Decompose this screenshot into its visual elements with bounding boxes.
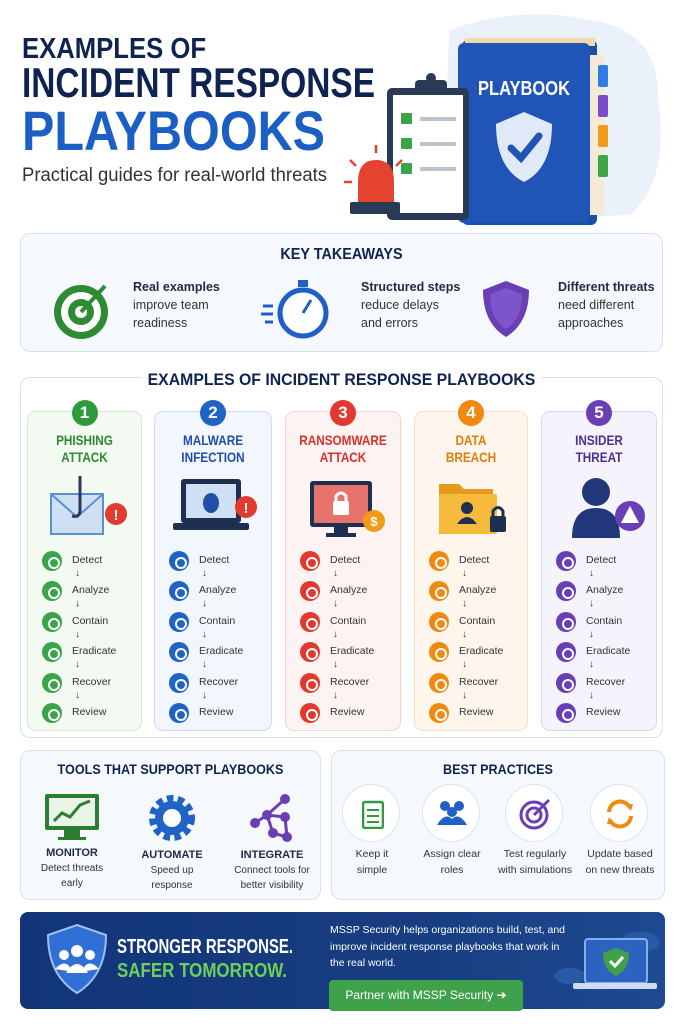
card: malware infection: Review — [199, 706, 233, 718]
card: malware infection: Analyze — [199, 584, 236, 596]
card: data breach: ↓ — [462, 690, 467, 701]
card: phishing attack: ↓ — [75, 568, 80, 579]
card: ransomware attack — [285, 411, 401, 731]
practice: update based on new threats: Update based — [587, 848, 653, 860]
card: malware infection: MALWARE — [183, 432, 243, 448]
icon: stopwatch — [261, 280, 328, 338]
icon: shield — [483, 281, 529, 337]
card: data breach: 4 — [466, 403, 476, 422]
card: insider threat: Review — [586, 706, 620, 718]
tool: automate: Speed up — [151, 865, 193, 876]
card: data breach: Recover — [459, 676, 498, 688]
card: phishing attack: ATTACK — [61, 449, 108, 465]
card: insider threat — [541, 411, 657, 731]
banner: call to action — [20, 912, 665, 1009]
card: data breach: Contain — [459, 615, 495, 627]
icon: laptop bug — [173, 479, 257, 530]
card: data breach: ↓ — [462, 568, 467, 579]
practice: test regularly: Test regularly — [504, 848, 566, 860]
card: phishing attack: 1 — [80, 403, 89, 422]
button: partner — [329, 980, 523, 1011]
practice: test regularly: with simulations — [498, 864, 572, 876]
card: data breach: DATA — [456, 432, 486, 448]
card: malware infection: ↓ — [202, 629, 207, 640]
card: malware infection — [154, 411, 272, 731]
takeaway 1: improve team — [133, 298, 209, 312]
takeaway 1: Real examples — [133, 280, 220, 294]
card: data breach: Review — [459, 706, 493, 718]
card: insider threat: ↓ — [589, 629, 594, 640]
heading: best practices: BEST PRACTICES — [443, 761, 553, 777]
practice: assign clear roles: Assign clear — [423, 848, 481, 860]
card: insider threat: INSIDER — [575, 432, 623, 448]
card: ransomware attack: Contain — [330, 615, 366, 627]
heading: examples: EXAMPLES OF INCIDENT RESPONSE PLAYBOOKS — [148, 370, 535, 389]
card: ransomware attack: 3 — [338, 403, 348, 422]
card: malware infection: Eradicate — [199, 645, 243, 657]
panel: examples of incident response playbooks — [20, 377, 663, 738]
card: data breach: Detect — [459, 554, 489, 566]
takeaway 3: approaches — [558, 316, 623, 330]
card: phishing attack: PHISHING — [56, 432, 113, 448]
hero illustration: clipboard, alarm and playbook — [344, 14, 661, 225]
takeaway 2: Structured steps — [361, 280, 460, 294]
card: ransomware attack: Review — [330, 706, 364, 718]
practice: keep it simple: simple — [357, 864, 387, 876]
button: partner: Partner with MSSP Security ➔ — [345, 988, 507, 1002]
title: EXAMPLES OF — [22, 33, 206, 65]
takeaway 2: and errors — [361, 316, 418, 330]
card: malware infection: INFECTION — [181, 449, 245, 465]
title: PLAYBOOKS — [22, 99, 325, 162]
slogan — [117, 936, 293, 982]
practice: assign clear roles: roles — [441, 864, 463, 876]
card: ransomware attack: RANSOMWARE — [299, 432, 387, 448]
takeaway 1: readiness — [133, 316, 187, 330]
subtitle: Practical guides for real-world threats — [22, 165, 327, 186]
practice: update based on new threats — [586, 784, 654, 876]
takeaway 3: Different threats — [558, 280, 655, 294]
card: malware infection: Detect — [199, 554, 229, 566]
tool: monitor — [41, 794, 103, 889]
heading: key takeaways: KEY TAKEAWAYS — [280, 246, 403, 263]
card: phishing attack: Recover — [72, 676, 111, 688]
card: data breach: ↓ — [462, 659, 467, 670]
card: ransomware attack: ↓ — [333, 690, 338, 701]
tool: integrate — [234, 794, 310, 891]
card: insider threat: THREAT — [576, 449, 622, 465]
icon: laptop bug: ! — [244, 500, 248, 517]
card: ransomware attack: Detect — [330, 554, 360, 566]
icon: email hook: ! — [114, 507, 118, 524]
tool: automate — [141, 795, 203, 891]
practice: assign clear roles — [422, 784, 481, 876]
tool: monitor: Detect threats — [41, 863, 103, 874]
practice: test regularly — [498, 784, 572, 876]
takeaway 2 — [261, 280, 460, 338]
card: malware infection: ↓ — [202, 568, 207, 579]
card: data breach: Eradicate — [459, 645, 503, 657]
tool: automate: response — [151, 880, 193, 891]
card: insider threat: ↓ — [589, 659, 594, 670]
card: data breach: ↓ — [462, 629, 467, 640]
panel: best practices — [331, 750, 665, 900]
card: ransomware attack: ↓ — [333, 598, 338, 609]
takeaway 3: need different — [558, 298, 634, 312]
practice: keep it simple — [342, 784, 400, 876]
card: ransomware attack: ↓ — [333, 659, 338, 670]
takeaway 2: reduce delays — [361, 298, 439, 312]
tool: integrate: better visibility — [241, 880, 303, 891]
card: phishing attack: Eradicate — [72, 645, 116, 657]
card: insider threat: 5 — [594, 403, 604, 422]
tool: monitor: MONITOR — [46, 847, 98, 859]
card: data breach: ↓ — [462, 598, 467, 609]
card: phishing attack: Detect — [72, 554, 102, 566]
card: insider threat: Detect — [586, 554, 616, 566]
icon: target — [54, 284, 108, 339]
card: ransomware attack: ↓ — [333, 568, 338, 579]
card: malware infection: ↓ — [202, 659, 207, 670]
card: phishing attack — [27, 411, 142, 731]
card: phishing attack: Contain — [72, 615, 108, 627]
card: malware infection: ↓ — [202, 690, 207, 701]
icon: locked monitor — [310, 481, 385, 537]
icon: laptop with shield — [554, 932, 660, 989]
card: phishing attack: Analyze — [72, 584, 109, 596]
takeaway 1 — [54, 280, 220, 339]
title — [22, 33, 375, 162]
takeaway 3 — [483, 280, 655, 337]
card: data breach: Analyze — [459, 584, 496, 596]
card: insider threat: Contain — [586, 615, 622, 627]
card: malware infection: Recover — [199, 676, 238, 688]
card: phishing attack: Review — [72, 706, 106, 718]
card: phishing attack: ↓ — [75, 629, 80, 640]
card: insider threat: ↓ — [589, 598, 594, 609]
card: insider threat: Eradicate — [586, 645, 630, 657]
tool: monitor: early — [61, 878, 83, 889]
text: description: MSSP Security helps organizations build, test, and improve incident response playbooks that work in the real world. — [330, 924, 565, 969]
panel: tools that support playbooks — [20, 750, 321, 900]
card: phishing attack: ↓ — [75, 659, 80, 670]
card: data breach: BREACH — [446, 449, 496, 465]
card: ransomware attack: ↓ — [333, 629, 338, 640]
icon: email hook — [50, 476, 127, 535]
card: insider threat: ↓ — [589, 690, 594, 701]
practice: update based on new threats: on new threats — [586, 864, 654, 876]
tool: automate: AUTOMATE — [141, 849, 203, 861]
card: malware infection: ↓ — [202, 598, 207, 609]
heading: tools: TOOLS THAT SUPPORT PLAYBOOKS — [58, 761, 283, 777]
card: ransomware attack: Eradicate — [330, 645, 374, 657]
card: ransomware attack: Analyze — [330, 584, 367, 596]
card: insider threat: Analyze — [586, 584, 623, 596]
card: insider threat: Recover — [586, 676, 625, 688]
card: data breach — [414, 411, 528, 731]
card: ransomware attack: ATTACK — [320, 449, 366, 465]
icon: locked monitor: $ — [370, 514, 378, 529]
card: malware infection: 2 — [208, 403, 218, 422]
card: phishing attack: ↓ — [75, 690, 80, 701]
practice: keep it simple: Keep it — [356, 848, 388, 860]
hero illustration: clipboard, alarm and playbook: PLAYBOOK — [478, 78, 570, 100]
card: malware infection: Contain — [199, 615, 235, 627]
card: phishing attack: ↓ — [75, 598, 80, 609]
icon: folder lock — [439, 484, 506, 534]
tool: integrate: Connect tools for — [234, 865, 310, 876]
tool: integrate: INTEGRATE — [241, 849, 303, 861]
icon: shield with people — [47, 924, 107, 994]
card: insider threat: ↓ — [589, 568, 594, 579]
icon: hooded figure — [572, 478, 645, 538]
panel: key takeaways — [20, 233, 663, 352]
card: ransomware attack: Recover — [330, 676, 369, 688]
